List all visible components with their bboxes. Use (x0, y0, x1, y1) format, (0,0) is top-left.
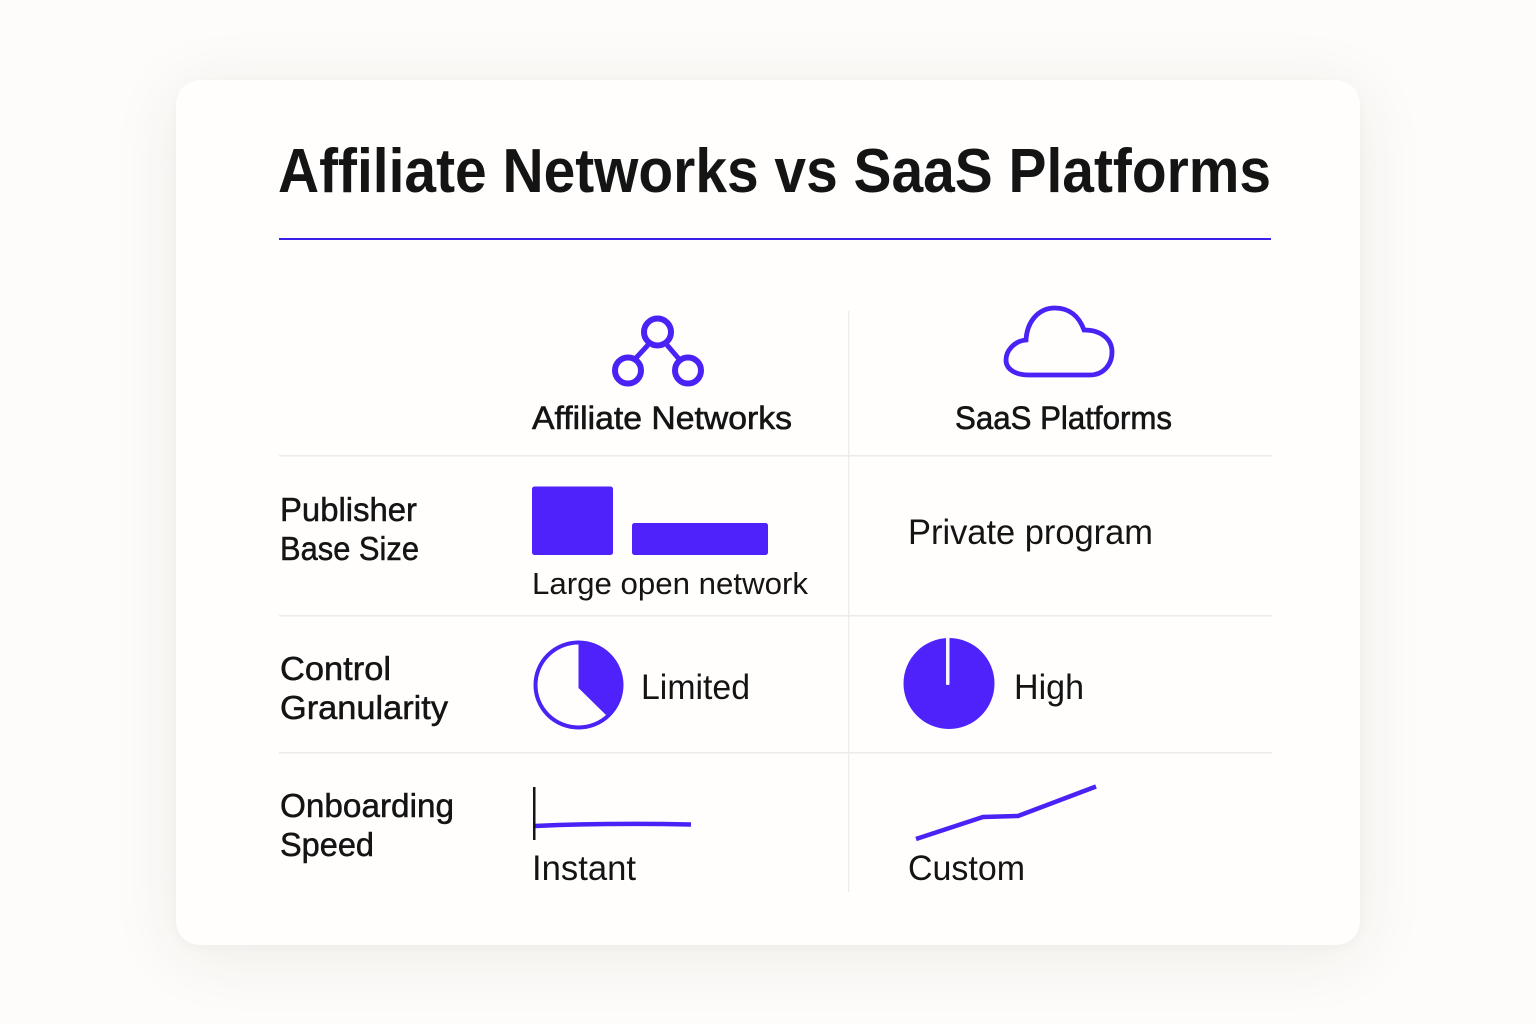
row label: Publisher Base Size (280, 491, 419, 567)
bar chart: publisher base (532, 486, 768, 555)
row label: Onboarding Speed: Speed (280, 826, 374, 863)
value: Private program: Private program (908, 513, 1153, 552)
title: Affiliate Networks vs SaaS Platforms (278, 137, 1271, 206)
row label: Control Granularity (280, 650, 449, 726)
row label: Control Granularity: Granularity (280, 689, 449, 726)
icon: cloud (1006, 308, 1112, 375)
value: Custom: Custom (908, 849, 1025, 888)
line chart: instant onboarding (533, 787, 691, 840)
value: High: High (1014, 668, 1084, 707)
row label: Control Granularity: Control (280, 650, 391, 687)
value: Large open network: Large open network (532, 566, 808, 601)
line chart: custom onboarding (916, 786, 1096, 839)
pie icon: high control (904, 637, 994, 729)
row label: Publisher Base Size: Publisher (280, 491, 417, 528)
row label: Onboarding Speed (280, 787, 454, 863)
panel: comparison card (176, 80, 1360, 945)
row label: Onboarding Speed: Onboarding (280, 787, 454, 824)
row label: Publisher Base Size: Base Size (280, 530, 419, 567)
value: Instant: Instant (532, 849, 636, 888)
column heading: Affiliate Networks: Affiliate Networks (532, 400, 792, 436)
title underline (279, 238, 1271, 240)
column heading: SaaS Platforms: SaaS Platforms (955, 400, 1172, 436)
icon: network nodes (615, 318, 701, 384)
value: Limited: Limited (641, 668, 750, 707)
pie icon: limited control (536, 642, 622, 728)
